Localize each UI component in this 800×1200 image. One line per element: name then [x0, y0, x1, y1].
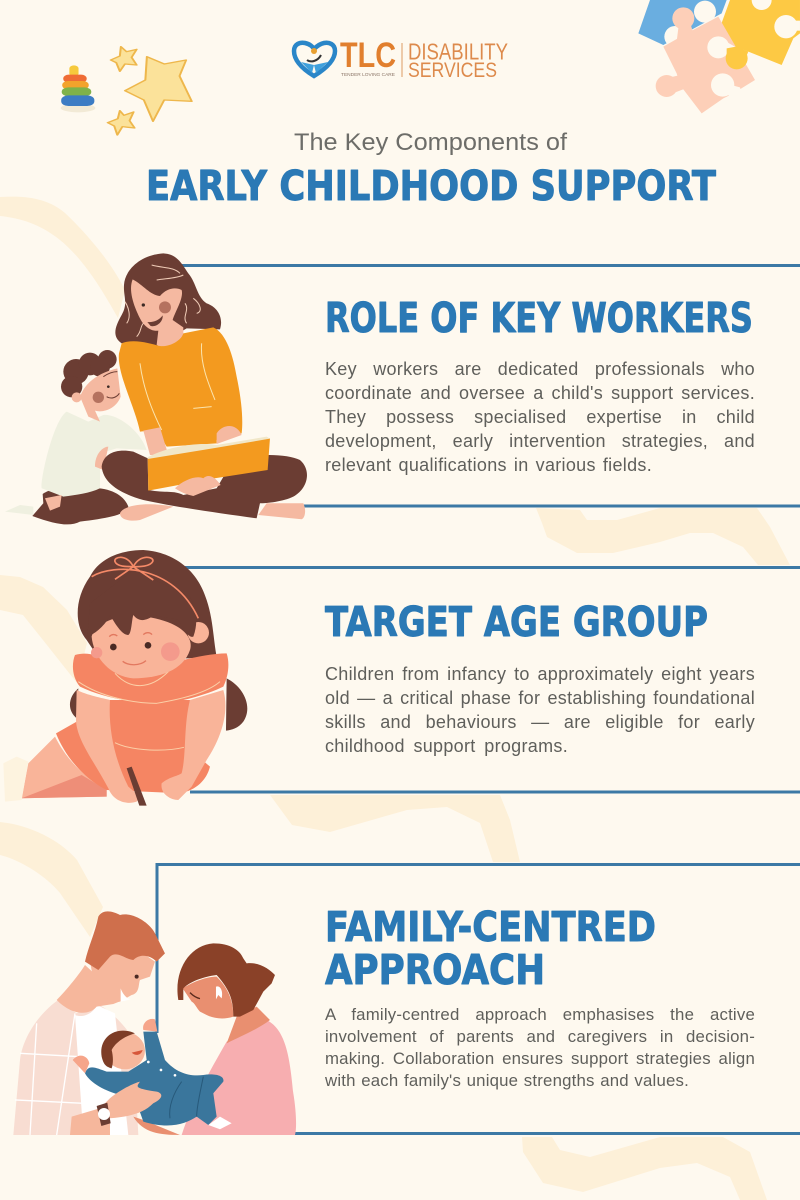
mother neck: [227, 1007, 270, 1043]
icon: stars: [108, 47, 192, 135]
illustration: parents with baby: [13, 911, 296, 1135]
baby suit: [85, 1032, 223, 1126]
woman face: [131, 279, 183, 347]
panel 2 body text: skills and behaviours — are eligible for early: [325, 712, 755, 732]
father shirt: [13, 1000, 138, 1135]
illustration: girl crawling: [3, 550, 247, 806]
girl dress: [56, 700, 210, 793]
logo: SERVICES: [408, 59, 497, 82]
girl face: [188, 622, 209, 643]
panel 3 body text: [325, 1005, 755, 1090]
father face: [90, 947, 155, 1002]
boy hands: [45, 447, 108, 511]
girl pencil: [127, 767, 147, 806]
panel 1 body text: They possess specialised expertise in child: [325, 407, 755, 427]
father watch: [97, 1103, 111, 1126]
mother hand: [133, 1117, 180, 1135]
mother face: [183, 977, 233, 1018]
woman hands: [175, 476, 221, 496]
girl hair: [78, 550, 217, 660]
woman sweater: [119, 327, 242, 447]
panel 3 heading: APPROACH: [325, 946, 545, 994]
panel 3 heading: [325, 903, 656, 994]
icon: puzzle pieces: [638, 0, 800, 113]
panel 3 heading: FAMILY-CENTRED: [325, 903, 656, 951]
panel 2 body text: Children from infancy to approximately eight years: [325, 664, 755, 684]
panel 1 body text: coordinate and oversee a child's support services.: [325, 383, 755, 403]
mother hair: [177, 943, 275, 1017]
boy legs: [32, 487, 128, 524]
panel frame lines: [156, 264, 800, 1135]
panel 3 body text: A family-centred approach emphasises the active: [325, 1005, 755, 1024]
panel 3 body text: involvement of parents and caregivers in decision-: [325, 1027, 755, 1046]
open book: [148, 438, 270, 491]
panel 1 body text: Key workers are dedicated professionals who: [325, 359, 755, 379]
woman feet: [120, 503, 305, 521]
title: eyebrow: The Key Components of: [294, 129, 567, 156]
panel 3 body text: making. Collaboration ensures support strategies align: [325, 1049, 755, 1068]
boy hair: [61, 350, 117, 397]
boy face: [80, 368, 121, 422]
logo: tagline: TENDER LOVING CARE: [341, 72, 395, 77]
father arm: [70, 1082, 161, 1135]
panel 2 body text: [325, 664, 755, 756]
father tee: [75, 1005, 128, 1135]
girl facial features: [110, 644, 117, 650]
woman hair: [115, 253, 221, 346]
girl leg: [22, 737, 107, 798]
icon: stacking ring toy: [61, 65, 95, 112]
father hair: [85, 911, 165, 970]
baby hands: [73, 1019, 157, 1073]
logo: disability services: DISABILITY: [408, 38, 508, 64]
panel 1 body text: [325, 359, 755, 475]
baby head: [105, 1032, 145, 1069]
woman legs: [102, 451, 307, 518]
father neck: [57, 965, 123, 1013]
panel 1 body text: development, early intervention strategies, and: [325, 431, 755, 451]
girl arms: [76, 690, 140, 803]
panel 2 body text: childhood support programs.: [325, 736, 568, 756]
woman forearms: [143, 426, 242, 455]
illustration: mother reading to child: [5, 253, 307, 524]
logo: [294, 36, 508, 82]
mother blouse: [182, 1020, 296, 1135]
title: main heading: EARLY CHILDHOOD SUPPORT: [146, 162, 716, 210]
panel 3 body text: with each family's unique strengths and values.: [325, 1071, 689, 1090]
panel 2 body text: old — a critical phase for establishing foundational: [325, 688, 755, 708]
panel 1 body text: relevant qualifications in various fields.: [325, 455, 652, 475]
logo: TLC wordmark: TLC: [340, 36, 396, 75]
girl fringe: [87, 570, 196, 637]
logo: heart emblem: [294, 43, 335, 76]
girl headband: [92, 557, 198, 618]
girl collar: [73, 653, 228, 703]
boy shirt: [42, 412, 147, 497]
panel 2 heading: TARGET AGE GROUP: [325, 598, 708, 646]
